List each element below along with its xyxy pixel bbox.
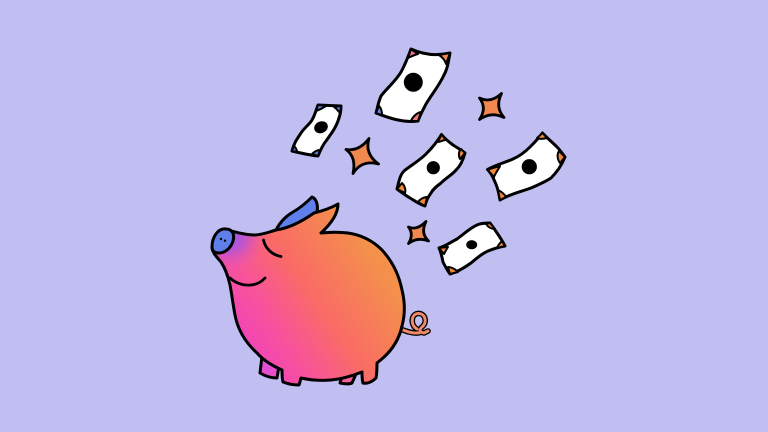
pig: tail — [403, 313, 428, 333]
bill: centre — [397, 134, 465, 206]
pig: snout shading — [212, 230, 276, 300]
pig: outline — [212, 204, 404, 385]
bill: lower — [439, 223, 505, 274]
pig: smile — [230, 278, 265, 285]
sparkles — [346, 94, 504, 244]
pig: back right leg — [340, 374, 356, 384]
bill: top large — [376, 49, 450, 121]
pig: far ear — [276, 197, 317, 230]
money bills — [292, 49, 565, 274]
bill: right — [488, 133, 565, 200]
pig: closed eye — [264, 240, 281, 256]
pig: nostrils — [220, 238, 226, 242]
pig: grain texture — [212, 204, 404, 385]
pig: snout disc — [212, 229, 234, 253]
pig: body — [212, 204, 404, 385]
sparkle: small centre — [408, 222, 428, 244]
sparkle: left — [346, 138, 378, 174]
sparkle: top right — [480, 94, 504, 120]
pig: back left leg — [260, 356, 279, 378]
piggy bank — [212, 197, 428, 385]
bill: left small — [292, 105, 341, 156]
